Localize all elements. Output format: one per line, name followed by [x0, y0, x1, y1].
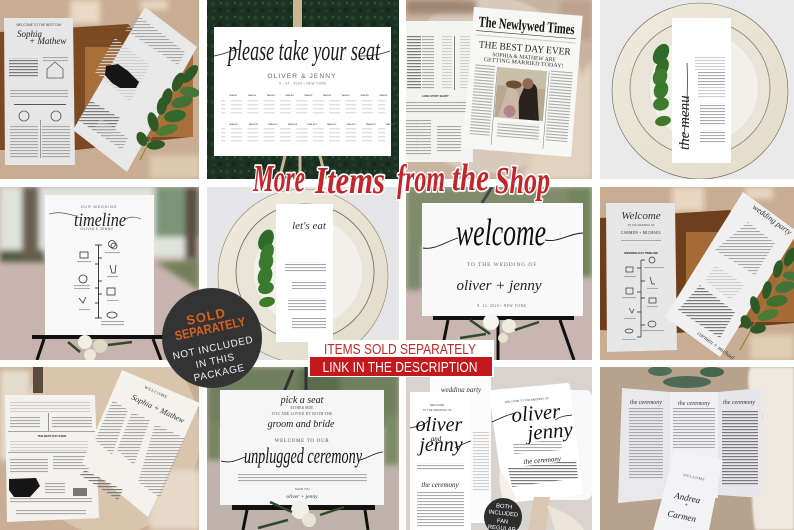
sign: unplugged ceremony: THANK YOU [294, 487, 310, 491]
card: folded welcome program: WELCOME [683, 473, 706, 482]
paper: oliver and jenny program: and [431, 435, 442, 443]
ribbon and fan handle [499, 470, 584, 530]
menu card: let's eat [292, 220, 327, 232]
easel and flowers [433, 314, 574, 360]
paper: crossword and timeline back page [406, 21, 473, 162]
badge: sold separately: NOT INCLUDED [172, 335, 254, 362]
sign: unplugged ceremony: YOU ARE LOVED BY BOTH THE [271, 412, 333, 416]
paper: program front [4, 18, 75, 165]
paper: oliver and jenny program: TO THE WEDDING OF [422, 408, 452, 412]
icon: stacked plates [612, 3, 788, 179]
paper: oliver and jenny program: oliver [416, 414, 463, 436]
icon: green leaf sprig [134, 62, 201, 160]
badge: both included: BOTH [496, 503, 512, 511]
paper: tri-fold brochure [618, 388, 762, 503]
sign: please take your seat [214, 27, 415, 156]
sign: please take your seat: OLIVER & JENNY [267, 73, 337, 80]
panel: seating chart sign on hedge [207, 0, 415, 180]
paper: fan program [492, 386, 580, 500]
paper: The Newlywed Times front page: SOPHIA & MATHEW ARE [492, 52, 557, 63]
menu card [276, 204, 333, 342]
sign: please take your seat: TABLE11 TABLE12 TABLE13 TABLE14 TABLE15 TABLE16 TABLE17 TABLE18 TABLE19 TABLE20 [229, 123, 415, 126]
badge: both included [484, 498, 522, 530]
sign: unplugged ceremony: oliver + jenny [286, 494, 318, 500]
easel and flowers [232, 501, 375, 530]
paper: program front: TO THE WEDDING OF [628, 223, 655, 227]
panel: menu card on plate [600, 0, 794, 179]
sign: our wedding timeline: OUR WEDDING [81, 205, 117, 209]
sign: welcome: oliver + jenny [456, 278, 542, 294]
paper: front with map: THE BEST DAY EVER [38, 434, 66, 438]
banner: items sold separately: LINK IN THE DESCRIPTION [322, 360, 478, 376]
paper: The Newlywed Times front page: THE BEST DAY EVER [478, 40, 571, 58]
icon: eucalyptus wreath [648, 366, 724, 388]
paper: program front: WEDDING DAY TIMELINE [624, 251, 658, 255]
badge: sold separately: SEPARATELY [173, 314, 247, 343]
sign: unplugged ceremony: unplugged ceremony [244, 443, 362, 468]
paper: tri-fold brochure: the ceremony [723, 400, 755, 406]
sign: welcome [422, 203, 583, 316]
icon: plates [218, 189, 388, 363]
timeline chart [74, 240, 124, 327]
panel: unplugged ceremony sign [207, 367, 399, 530]
panel: let's eat menu on plate [207, 187, 399, 363]
sign: unplugged ceremony: pick a seat [280, 395, 324, 406]
title: More Items from the Shop: the [452, 157, 489, 199]
paper: program front: + Mathew [29, 36, 66, 46]
panel: wedding program on wooden board [0, 0, 201, 179]
badge: sold separately: PACKAGE [193, 363, 246, 384]
title: More Items from the Shop: Items [314, 160, 385, 202]
sign: unplugged ceremony [220, 390, 384, 505]
title: More Items from the Shop: from [397, 158, 445, 200]
title: More Items from the Shop: More [252, 158, 305, 200]
title: More Items from the Shop [252, 157, 550, 202]
panel: wedding timeline sign in park [0, 187, 199, 361]
paper: crossword and timeline back page: LONG STORY SHORT [422, 94, 449, 98]
paper: welcome program [80, 370, 200, 517]
paper: tri-fold brochure: the ceremony [678, 401, 710, 407]
paper: program front [606, 203, 677, 352]
paper: wedding party back [430, 377, 491, 523]
paper: wedding party and ceremony: carmen + michael [696, 331, 735, 362]
paper: fan program: WELCOME TO THE WEDDING OF [505, 396, 549, 404]
paper: wedding party back: wedding party [441, 386, 482, 394]
menu card: the menu [677, 95, 693, 150]
badge: both included: INCLUDED [488, 509, 518, 519]
badge: sold separately: SOLD [185, 305, 227, 328]
sign: unplugged ceremony: EITHER SIDE [291, 406, 314, 410]
menu card [672, 18, 731, 163]
paper: welcome program: WELCOME [144, 384, 169, 400]
sign: unplugged ceremony: WELCOME TO OUR [275, 439, 329, 444]
paper: oliver and jenny program: the ceremony [421, 481, 460, 489]
paper: program front: CARMEN + MICHAEL [621, 231, 661, 235]
paper: front with map [5, 395, 99, 522]
paper: oliver and jenny program: WELCOME [430, 403, 444, 407]
sign: our wedding timeline [45, 195, 154, 335]
paper: program front: WELCOME TO THE BEST DAY [16, 23, 62, 27]
paper: program front: Welcome [621, 210, 661, 222]
panel: gate-fold ceremony program [600, 366, 794, 530]
paper: fan program: the ceremony [523, 455, 562, 466]
panel: regular and fan programs [406, 367, 592, 530]
paper: program front: Sophia [17, 29, 43, 39]
card: folded welcome program: Andrea [673, 490, 702, 505]
badge: both included: FAN [497, 518, 508, 526]
sign: welcome: welcome [456, 212, 546, 254]
sign: welcome: TO THE WEDDING OF [467, 262, 537, 268]
paper: program back with map [73, 7, 197, 172]
paper: The Newlywed Times front page [462, 7, 583, 157]
title: More Items from the Shop: Shop [495, 160, 550, 202]
icon: green leaves [652, 44, 671, 126]
panel: wedding program on wood, right [600, 187, 794, 362]
panel: program on round wooden table [0, 367, 199, 530]
paper: The Newlywed Times front page: GETTING MARRIED TODAY! [483, 57, 564, 70]
card: folded welcome program: Carmen [667, 508, 698, 524]
sign: our wedding timeline: OLIVIA & JENNY [80, 227, 114, 231]
paper: fan program: oliver [510, 399, 562, 427]
sign: our wedding timeline: timeline [74, 210, 126, 231]
sign: please take your seat: 9 . 24 . 2020 • NEW YORK [279, 82, 327, 86]
banner: items sold separately: ITEMS SOLD SEPARATELY [324, 342, 476, 358]
panel: newspaper program [398, 0, 592, 179]
paper: oliver and jenny program: jenny [416, 434, 463, 456]
banner: items sold separately [308, 340, 494, 377]
badge: sold separately [162, 288, 262, 388]
paper: oliver and jenny program [410, 392, 471, 530]
card: folded welcome program [652, 450, 723, 530]
badge: sold separately: IN THIS [195, 352, 236, 371]
paper: The Newlywed Times front page: The Newlywed Times [478, 14, 575, 38]
card: folded welcome program: + [684, 502, 689, 509]
easel and flowers [32, 335, 165, 361]
icon: leaf sprig [739, 246, 794, 350]
paper: fan program back [550, 390, 592, 500]
paper: wedding party and ceremony: wedding party [751, 202, 794, 237]
icon: leaves [258, 230, 275, 308]
sign: please take your seat: please take your seat [227, 36, 381, 67]
paper: tri-fold brochure: the ceremony [630, 400, 662, 406]
paper: welcome program: Sophia + Mathew [130, 393, 187, 425]
paper: wedding party and ceremony [665, 192, 794, 362]
sign: please take your seat: TABLE1 TABLE2 TABLE3 TABLE4 TABLE5 TABLE6 TABLE7 TABLE8 TABLE9 TABLE10 [229, 94, 408, 97]
sign: unplugged ceremony: groom and bride [268, 419, 335, 430]
panel: welcome sign [406, 187, 592, 360]
sign: welcome: 9. 24. 2020 • NEW YORK [477, 304, 527, 308]
photo: couple [494, 67, 547, 121]
paper: fan program: jenny [523, 417, 574, 445]
